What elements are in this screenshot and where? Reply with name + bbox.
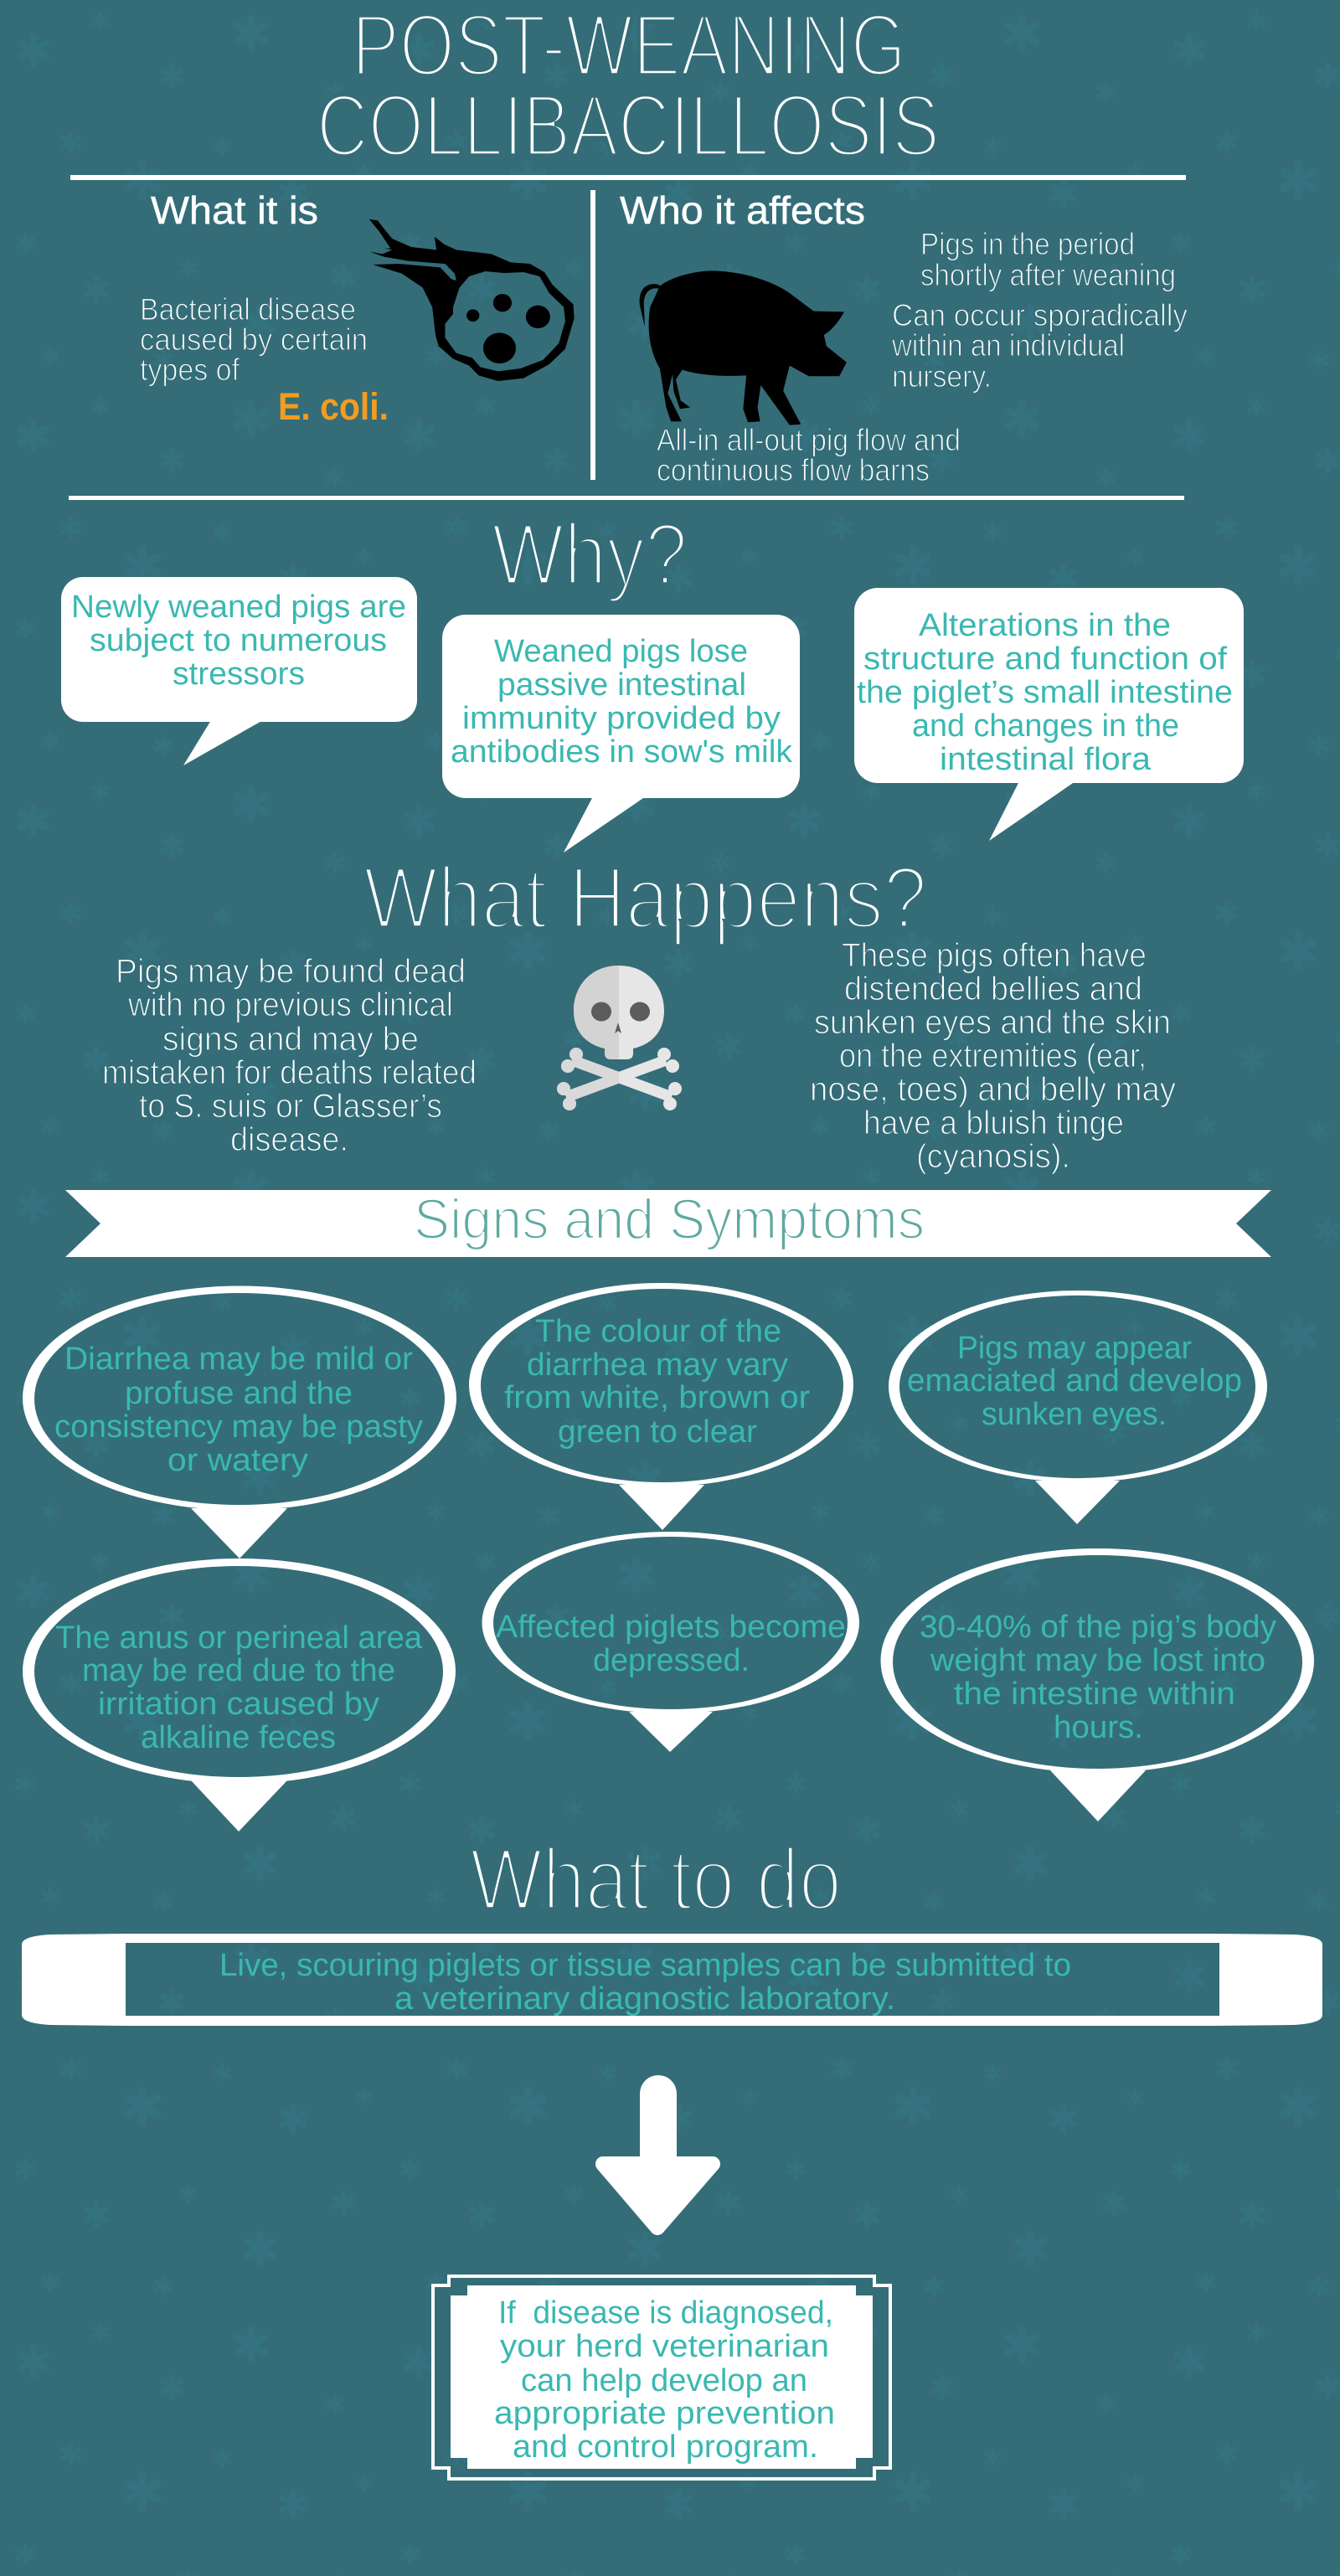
icon: bacterium (369, 219, 575, 381)
text: found dead: with no previous clinical (127, 987, 453, 1023)
text: bacterial disease: caused by certain (140, 322, 368, 357)
text: found dead: mistaken for deaths related (102, 1054, 477, 1091)
symptom bubble: colour: diarrhea may vary (527, 1347, 788, 1383)
title (317, 0, 940, 175)
text: found dead (102, 953, 477, 1158)
text: bacterial disease: types of (140, 353, 240, 387)
title: COLLIBACILLOSIS (317, 77, 940, 175)
speech bubble 1 (61, 577, 417, 765)
text: can occur sporadically: nursery. (892, 359, 992, 394)
text: distended bellies: (cyanosis). (916, 1138, 1070, 1175)
symptom bubble: body weight: hours. (1054, 1710, 1143, 1745)
text: can occur sporadically: within an individual (891, 328, 1125, 363)
banner: signs and symptoms (65, 1188, 1271, 1257)
text: distended bellies: distended bellies and (844, 971, 1142, 1007)
symptom bubble: diarrhea: consistency may be pasty (54, 1409, 423, 1445)
symptom bubble: anus: irritation caused by (98, 1687, 379, 1722)
callout: submit samples: Live, scouring piglets or tissue samples can be submitted to (219, 1948, 1071, 1983)
symptom bubble: body weight: the intestine within (954, 1677, 1235, 1712)
heading: why: Why? (492, 506, 688, 604)
speech bubble 2 (442, 615, 800, 853)
icon: pig (640, 270, 847, 425)
symptom bubble: colour: green to clear (558, 1414, 757, 1450)
panel: who it affects (620, 188, 1188, 487)
text: found dead: disease. (230, 1121, 348, 1158)
text: distended bellies: on the extremities (ear, (839, 1038, 1147, 1074)
callout: herd veterinarian (433, 2276, 890, 2479)
text: distended bellies: have a bluish tinge (863, 1105, 1124, 1141)
text: bacterial disease (140, 292, 368, 387)
speech bubble 1: stressors (173, 657, 305, 692)
text: distended bellies: sunken eyes and the skin (814, 1004, 1171, 1041)
text: all-in all-out: All-in all-out pig flow and (657, 423, 961, 457)
symptom bubble: depressed: depressed. (593, 1643, 750, 1678)
speech bubble 2: immunity provided by (462, 701, 781, 736)
symptom bubble: anus: may be red due to the (82, 1653, 395, 1688)
symptom bubble: emaciated: Pigs may appear (957, 1331, 1192, 1366)
symptom bubble: anus: alkaline feces (141, 1720, 336, 1755)
text: can occur sporadically: Can occur sporadically (892, 298, 1188, 332)
speech bubble 3 (854, 588, 1244, 841)
callout: herd veterinarian: and control program. (513, 2429, 818, 2465)
speech bubble 2: passive intestinal (497, 667, 746, 703)
icon: skull and crossbones (557, 966, 682, 1110)
speech bubble 3: the piglet’s small intestine (857, 675, 1233, 710)
speech bubble 1: Newly weaned pigs are (71, 590, 406, 625)
vertical divider (590, 190, 595, 480)
speech bubble 3: structure and function of (863, 641, 1227, 677)
text: pigs in the period (920, 227, 1176, 292)
symptom bubble: body weight: 30-40% of the pig’s body (920, 1610, 1276, 1645)
symptom bubble: diarrhea: Diarrhea may be mild or (64, 1342, 413, 1377)
text: bacterial disease: Bacterial disease (140, 292, 356, 327)
banner: signs and symptoms: Signs and Symptoms (414, 1188, 925, 1251)
text: distended bellies: nose, toes) and belly may (810, 1071, 1176, 1108)
text: found dead: signs and may be (162, 1021, 419, 1058)
symptom bubble: colour: from white, brown or (504, 1380, 810, 1415)
callout: herd veterinarian: can help develop an (521, 2363, 807, 2398)
symptom bubble: anus (23, 1558, 456, 1832)
text: found dead: to S. suis or Glasser’s (139, 1088, 442, 1125)
heading: what happens: What Happens? (363, 849, 927, 947)
symptom bubble: diarrhea (23, 1286, 456, 1558)
heading: what to do: What to do (470, 1831, 842, 1929)
bottom divider (69, 496, 1184, 500)
symptom bubble: body weight (881, 1548, 1314, 1821)
text: distended bellies: These pigs often have (842, 937, 1147, 974)
arrow: down (603, 2075, 713, 2228)
callout: herd veterinarian: appropriate prevention (494, 2396, 835, 2431)
panel: what it is (140, 188, 575, 428)
speech bubble 2: antibodies in sow's milk (451, 734, 793, 770)
callout: herd veterinarian: If disease is diagnosed, (498, 2295, 833, 2331)
symptom bubble: emaciated: emaciated and develop (907, 1363, 1242, 1399)
symptom bubble: depressed: Affected piglets become (496, 1610, 846, 1645)
symptom bubble: body weight: weight may be lost into (930, 1643, 1265, 1678)
speech bubble 3: and changes in the (912, 708, 1179, 744)
top divider (70, 175, 1186, 180)
heading: who it affects: Who it affects (620, 188, 865, 232)
speech bubble 1: subject to numerous (90, 623, 387, 658)
callout: submit samples (22, 1934, 1322, 2026)
text: all-in all-out: continuous flow barns (657, 453, 930, 487)
speech bubble 2: Weaned pigs lose (494, 634, 748, 669)
text: pigs in the period: Pigs in the period (920, 227, 1135, 261)
symptom bubble: colour (469, 1283, 853, 1530)
symptom bubble: colour: The colour of the (535, 1314, 781, 1349)
speech bubble 3: intestinal flora (940, 742, 1152, 777)
callout: herd veterinarian: your herd veterinarian (500, 2329, 829, 2364)
symptom bubble: diarrhea: profuse and the (125, 1376, 353, 1411)
text: can occur sporadically (891, 298, 1188, 394)
symptom bubble: depressed (482, 1532, 859, 1752)
text: found dead: Pigs may be found dead (116, 953, 466, 990)
text: all-in all-out (657, 423, 961, 487)
symptom bubble: anus: The anus or perineal area (55, 1620, 423, 1656)
symptom bubble: emaciated (889, 1291, 1267, 1524)
text: distended bellies (810, 937, 1176, 1175)
callout: submit samples: a veterinary diagnostic laboratory. (394, 1981, 895, 2017)
text: pigs in the period: shortly after weaning (920, 258, 1176, 292)
symptom bubble: diarrhea: or watery (168, 1443, 308, 1478)
heading: what it is: What it is (151, 188, 318, 232)
symptom bubble: emaciated: sunken eyes. (982, 1397, 1167, 1432)
text: E. coli: E. coli. (278, 385, 389, 428)
speech bubble 3: Alterations in the (919, 608, 1171, 643)
